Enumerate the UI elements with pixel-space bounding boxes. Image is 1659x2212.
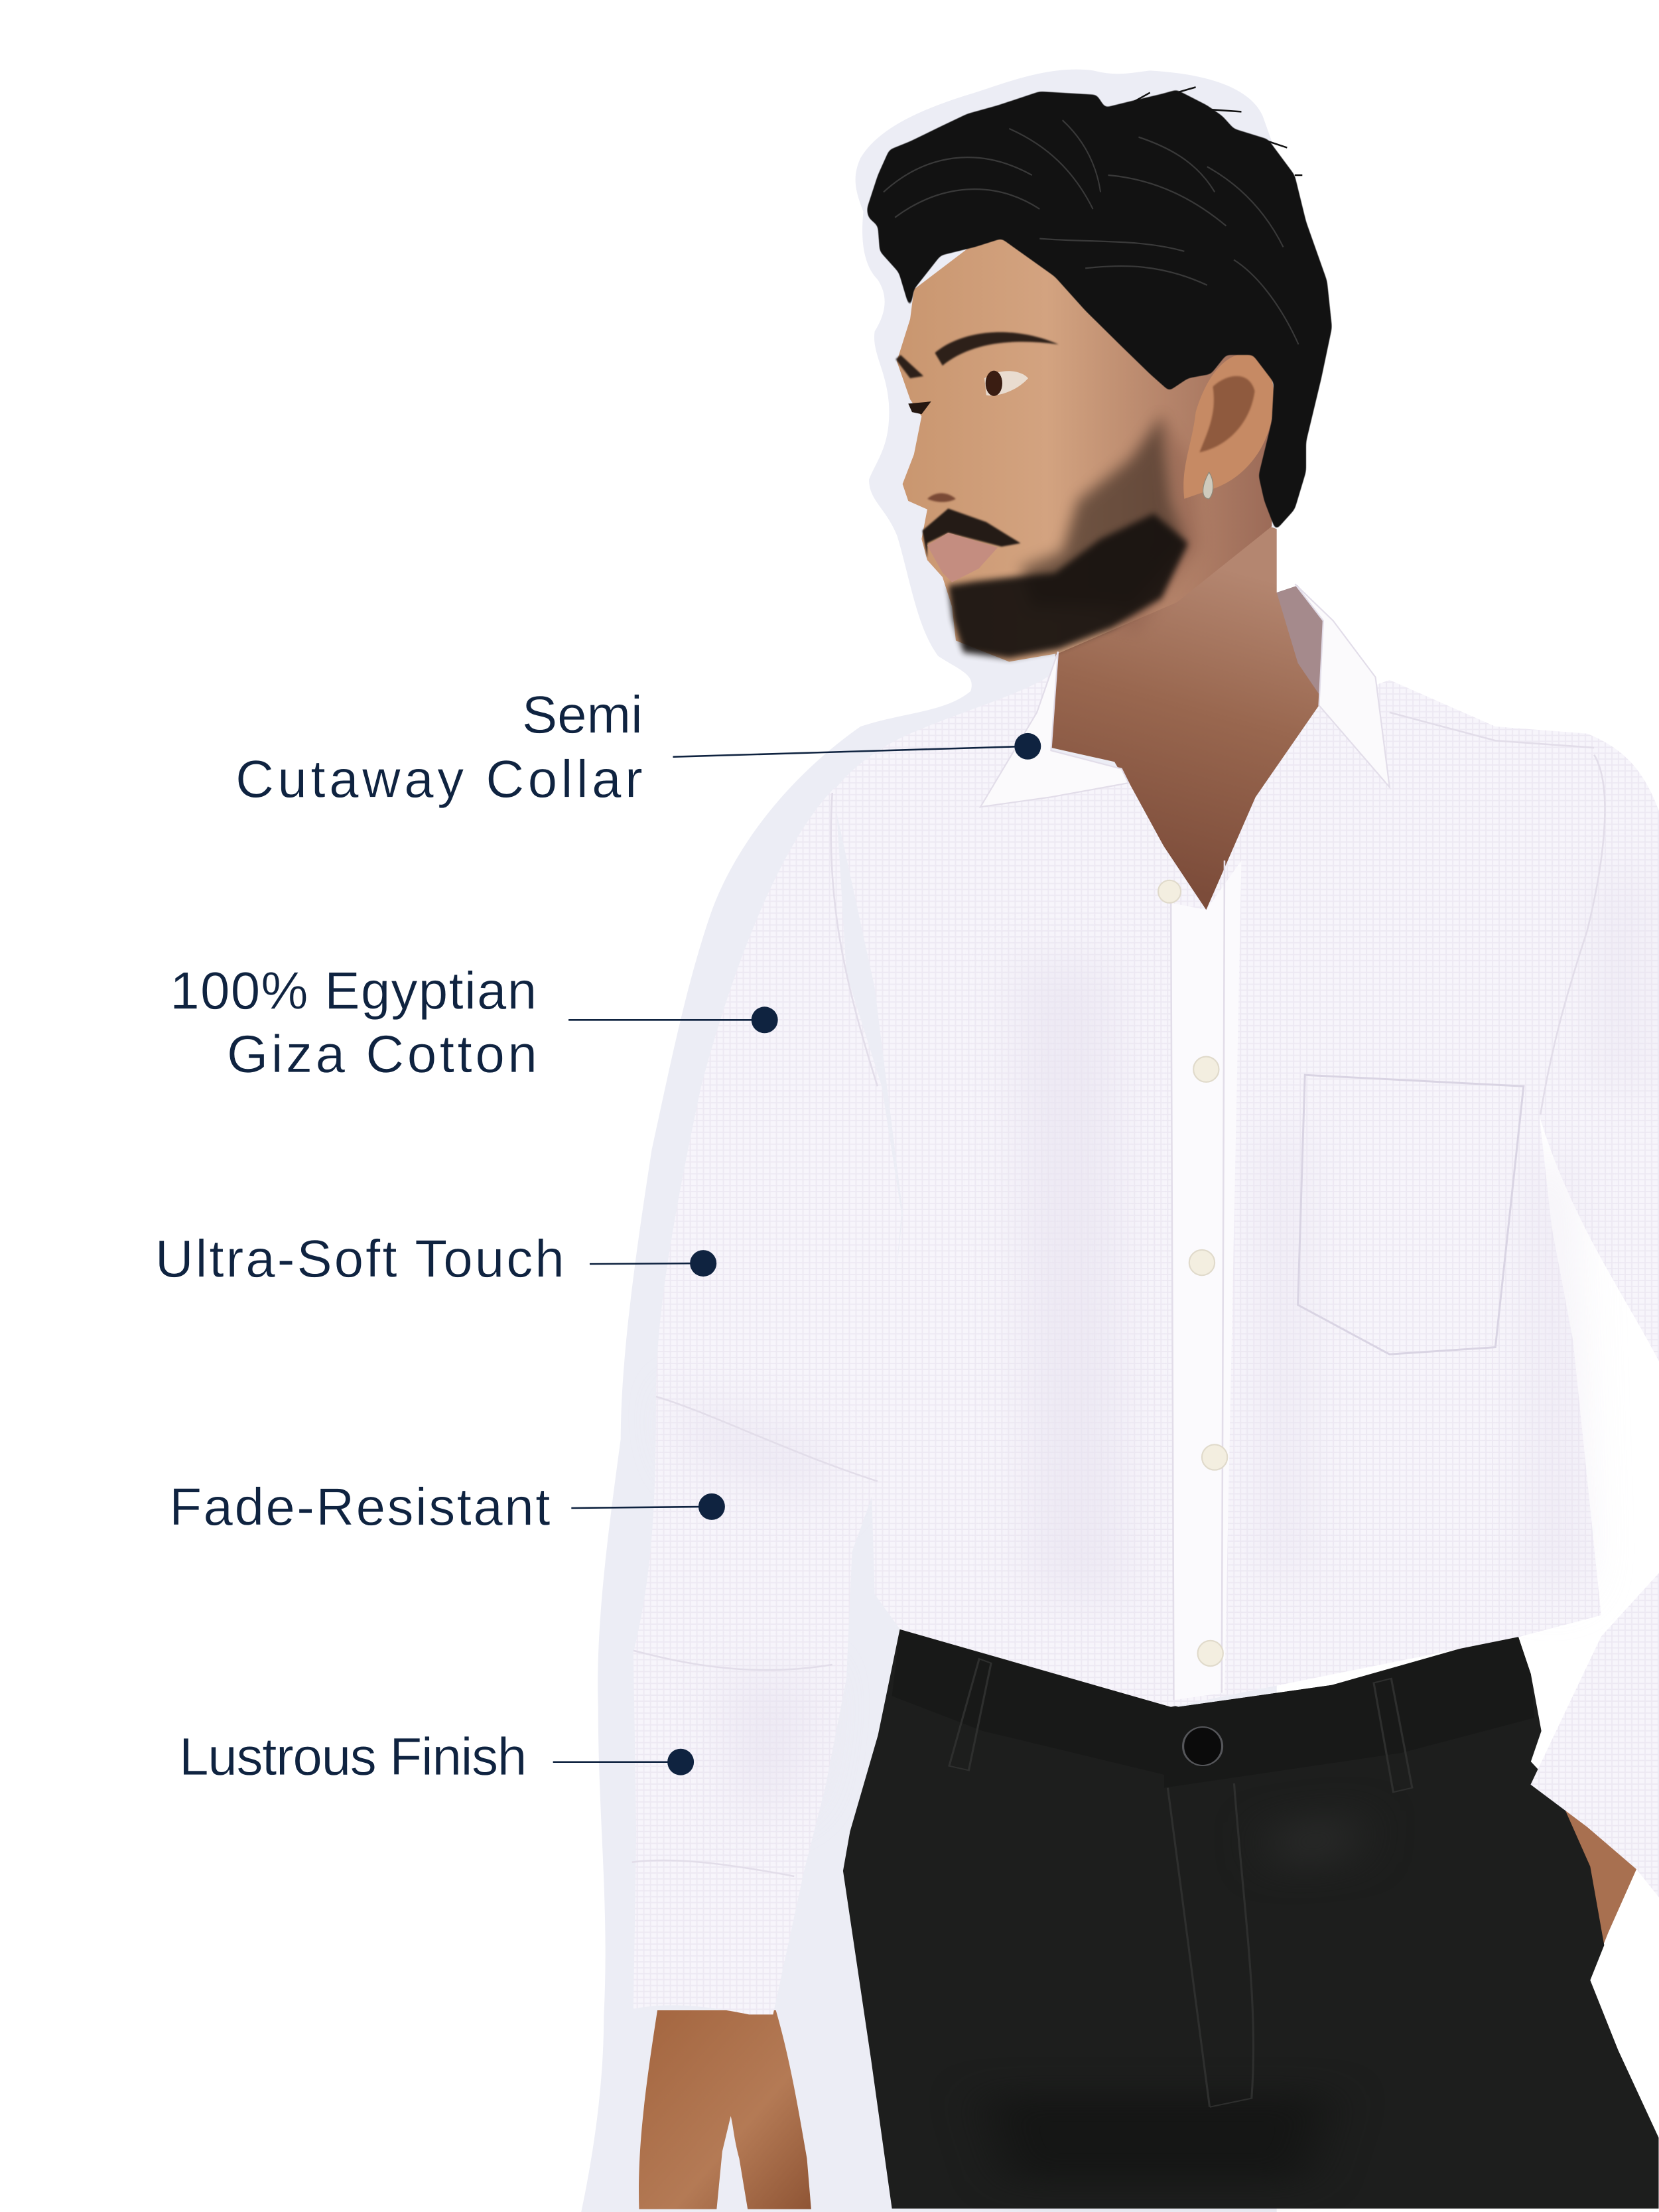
right hand in pocket <box>1555 1789 1636 1968</box>
dense beard <box>948 514 1188 658</box>
trouser shadow <box>982 2094 1332 2181</box>
head <box>867 87 1332 661</box>
label text: Ultra-Soft Touch <box>155 1229 564 1288</box>
leader line <box>553 1762 680 1763</box>
label text line 2: Giza Cotton <box>227 1024 537 1083</box>
shirt buttons <box>1081 769 1227 1666</box>
jaw shadow <box>1108 412 1199 632</box>
label text: Fade-Resistant <box>169 1478 550 1537</box>
ear <box>1183 353 1274 499</box>
waist button <box>1183 1727 1223 1765</box>
earring <box>1203 472 1213 499</box>
moustache <box>922 508 1021 558</box>
near eye <box>984 371 1028 396</box>
garment seams <box>632 713 1605 1876</box>
far eyebrow <box>896 355 923 378</box>
left hand <box>639 2010 811 2209</box>
right collar leaf <box>1295 584 1390 787</box>
leader line <box>673 746 1028 757</box>
collar band interior <box>1277 585 1323 699</box>
inner ear <box>1199 376 1255 452</box>
right forearm and cuff <box>1530 1573 1659 1898</box>
shirt shading <box>677 874 1644 1820</box>
iris <box>986 371 1002 396</box>
neck and chest <box>1051 494 1333 910</box>
trouser highlight <box>1269 1810 1360 1871</box>
trousers <box>843 1627 1658 2209</box>
leader line <box>568 1019 765 1020</box>
callout: fade-resistant <box>169 1478 725 1537</box>
callout: egyptian giza cotton <box>170 961 778 1083</box>
face skin <box>897 234 1272 661</box>
marker dot <box>667 1749 694 1775</box>
left collar leaf <box>980 652 1128 807</box>
eyebrow <box>935 332 1059 366</box>
model figure <box>632 87 1659 2209</box>
eye white <box>984 371 1028 395</box>
label text: Lustrous Finish <box>179 1727 527 1786</box>
sparse cheek stubble <box>1021 416 1184 606</box>
marker dot <box>690 1250 716 1277</box>
leader line <box>571 1507 711 1508</box>
collar <box>980 584 1390 807</box>
callout: ultra-soft touch <box>155 1229 716 1288</box>
label text: Semi <box>522 685 643 744</box>
far eye <box>908 401 931 414</box>
lavender silhouette halo <box>581 70 1277 2212</box>
hair flyaways <box>1131 87 1302 175</box>
right sleeve <box>1495 726 1659 1361</box>
left sleeve <box>633 787 901 2014</box>
hair <box>867 90 1332 531</box>
belt loops and seams <box>949 1659 1412 2107</box>
marker dot <box>752 1006 778 1033</box>
label text line 2: Cutaway Collar <box>235 749 643 808</box>
waistband <box>892 1627 1534 1788</box>
marker dot <box>698 1493 725 1520</box>
placket <box>1171 861 1241 1700</box>
chest pocket <box>1298 1075 1524 1354</box>
marker dot <box>1014 733 1041 760</box>
callout: lustrous finish <box>179 1727 694 1786</box>
hair highlights <box>884 120 1299 344</box>
nose shadow <box>927 493 956 502</box>
callout: semi cutaway collar <box>235 685 1041 808</box>
lips <box>927 533 998 582</box>
trouser body <box>843 1627 1658 2209</box>
leader line <box>590 1263 702 1264</box>
shirt torso <box>832 674 1623 1707</box>
label text: 100% Egyptian <box>170 961 537 1020</box>
